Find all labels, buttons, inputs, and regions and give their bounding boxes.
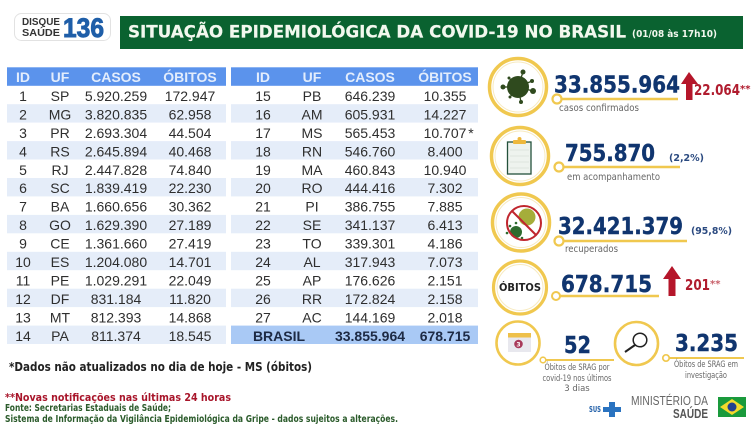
- table: states 1 to 14: 1.361.660: [85, 236, 147, 252]
- table: states 1 to 14: [7, 67, 226, 344]
- table: states 1 to 14: 9: [19, 236, 27, 252]
- table: states 1 to 14: ID: [16, 69, 30, 85]
- note: new notifications: **Novas notificações nas últimas 24 horas: [5, 391, 231, 404]
- table: states 1 to 14: 27.419: [169, 236, 212, 252]
- logo: Disque Saúde 136: SAÚDE: [22, 26, 60, 39]
- icon: clipboard: [492, 128, 548, 184]
- table: states 15 to 27 and Brazil total: 26: [255, 291, 271, 307]
- table: states 1 to 14: 10: [15, 254, 31, 270]
- table: states 1 to 14: RJ: [51, 162, 69, 178]
- table: states 1 to 14: MT: [50, 309, 71, 325]
- panel: recovered: [492, 194, 732, 255]
- table: states 15 to 27 and Brazil total: 16: [255, 106, 271, 122]
- table: states 15 to 27 and Brazil total: UF: [303, 69, 322, 85]
- table: states 1 to 14: 3.820.835: [85, 106, 147, 122]
- panel: SRAG deaths in last 3 days: 3 dias: [564, 384, 590, 394]
- source text: Fonte: Secretarias Estaduais de Saúde;: [5, 403, 171, 414]
- logo: SUS: SUS: [589, 405, 601, 414]
- table: states 1 to 14: 11: [16, 272, 30, 288]
- table: states 15 to 27 and Brazil total: 22: [255, 217, 271, 233]
- table: states 15 to 27 and Brazil total: 4.186: [427, 236, 463, 252]
- table: states 15 to 27 and Brazil total: 7.302: [427, 180, 463, 196]
- table: states 1 to 14: PA: [51, 328, 69, 344]
- table: states 15 to 27 and Brazil total: 2.018: [427, 309, 463, 325]
- table: states 15 to 27 and Brazil total: 17: [255, 125, 271, 141]
- table: states 1 to 14: 14: [15, 328, 31, 344]
- logo: Disque Saúde 136: 136: [63, 13, 104, 43]
- table: states 1 to 14: 8: [19, 217, 27, 233]
- source text: Sistema de Informação da Vigilância Epidemiológica da Gripe - dados sujeitos a alterações.: [5, 414, 398, 425]
- table: states 1 to 14: 1.029.291: [85, 272, 147, 288]
- title bar: (01/08 às 17h10): [632, 29, 717, 40]
- table: states 1 to 14: 74.840: [169, 162, 212, 178]
- table: states 1 to 14: 812.393: [91, 309, 142, 325]
- panel: SRAG deaths under investigation: 3.235: [675, 331, 738, 357]
- panel: under monitoring: 755.870: [565, 141, 655, 167]
- table: states 1 to 14: 7: [19, 199, 27, 215]
- table: states 15 to 27 and Brazil total: 386.755: [345, 199, 396, 215]
- table: states 15 to 27 and Brazil total: AC: [302, 309, 322, 325]
- table: states 15 to 27 and Brazil total: 24: [255, 254, 271, 270]
- panel: recovered: recuperados: [565, 244, 618, 255]
- panel: recovered: 32.421.379: [558, 214, 683, 240]
- table: states 15 to 27 and Brazil total: RN: [302, 143, 322, 159]
- table: states 15 to 27 and Brazil total: 20: [255, 180, 271, 196]
- table: states 15 to 27 and Brazil total: 646.239: [345, 88, 396, 104]
- table: states 1 to 14: 1.660.656: [85, 199, 147, 215]
- table: states 1 to 14: 22.230: [169, 180, 212, 196]
- title bar: SITUAÇÃO EPIDEMIOLÓGICA DA COVID-19 NO BRASIL: [128, 20, 626, 42]
- table: states 15 to 27 and Brazil total: [231, 67, 478, 344]
- table: states 1 to 14: 3: [19, 125, 27, 141]
- logo: Disque Saúde 136: DISQUE: [22, 16, 60, 28]
- table: states 1 to 14: 44.504: [169, 125, 212, 141]
- table: states 1 to 14: 1.839.419: [85, 180, 147, 196]
- table: states 15 to 27 and Brazil total: 19: [255, 162, 271, 178]
- table: states 1 to 14: 13: [15, 309, 31, 325]
- table: states 15 to 27 and Brazil total: 605.931: [345, 106, 396, 122]
- panel: SRAG deaths in last 3 days: Óbitos de SRAG por: [544, 361, 610, 373]
- table: states 1 to 14: ÓBITOS: [163, 68, 217, 85]
- table: states 15 to 27 and Brazil total: 176.626: [345, 272, 396, 288]
- table: states 1 to 14: ES: [51, 254, 69, 270]
- table: states 1 to 14: 2.693.304: [85, 125, 147, 141]
- table: states 1 to 14: 30.362: [169, 199, 212, 215]
- panel: deaths: [494, 261, 721, 314]
- logo: Ministério da Saúde: [631, 393, 708, 421]
- table: states 15 to 27 and Brazil total: 678.715: [420, 328, 471, 344]
- table: states 1 to 14: 811.374: [91, 328, 141, 344]
- table: states 1 to 14: 14.868: [169, 309, 212, 325]
- table: states 1 to 14: 4: [19, 143, 27, 159]
- logo: SUS: [589, 402, 621, 417]
- table: states 15 to 27 and Brazil total: 7.885: [427, 199, 463, 215]
- table: states 15 to 27 and Brazil total: AL: [303, 254, 321, 270]
- table: states 1 to 14: DF: [51, 291, 69, 307]
- table: states 1 to 14: 2: [19, 106, 27, 122]
- table: states 1 to 14: GO: [49, 217, 71, 233]
- table: states 1 to 14: 2.447.828: [85, 162, 147, 178]
- icon: magnifying glass: [615, 322, 658, 365]
- table: states 1 to 14: CE: [50, 236, 70, 252]
- panel: confirmed cases: **: [740, 84, 751, 95]
- table: states 15 to 27 and Brazil total: 15: [255, 88, 271, 104]
- panel: deaths: 678.715: [561, 272, 652, 298]
- table: states 15 to 27 and Brazil total: 33.855.964: [335, 328, 405, 344]
- logo: Ministério da Saúde: MINISTÉRIO DA: [631, 393, 708, 408]
- table: states 1 to 14: PR: [50, 125, 70, 141]
- table: states 1 to 14: 12: [15, 291, 31, 307]
- table: states 15 to 27 and Brazil total: 21: [255, 199, 271, 215]
- logo: Ministério da Saúde: SAÚDE: [673, 406, 708, 421]
- table: states 15 to 27 and Brazil total: 10.707: [424, 125, 467, 141]
- table: states 1 to 14: SC: [50, 180, 70, 196]
- table: states 15 to 27 and Brazil total: AM: [302, 106, 322, 122]
- table: states 1 to 14: BA: [51, 199, 70, 215]
- panel: under monitoring: em acompanhamento: [567, 172, 660, 183]
- table: states 15 to 27 and Brazil total: RO: [302, 180, 323, 196]
- source text: [5, 403, 398, 425]
- table: states 15 to 27 and Brazil total: ID: [256, 69, 270, 85]
- table: states 15 to 27 and Brazil total: 339.301: [345, 236, 396, 252]
- table: states 1 to 14: 14.701: [169, 254, 212, 270]
- icon: calendar: 3: [516, 342, 521, 348]
- table: states 1 to 14: 18.545: [169, 328, 212, 344]
- table: states 15 to 27 and Brazil total: 546.760: [345, 143, 396, 159]
- table: states 1 to 14: 22.049: [169, 272, 212, 288]
- table: states 15 to 27 and Brazil total: ÓBITOS: [418, 68, 472, 85]
- table: states 15 to 27 and Brazil total: 2.151: [427, 272, 463, 288]
- table: states 15 to 27 and Brazil total: 2.158: [427, 291, 463, 307]
- table: states 1 to 14: PE: [51, 272, 69, 288]
- table: states 1 to 14: SP: [51, 88, 69, 104]
- table: states 15 to 27 and Brazil total: 7.073: [427, 254, 463, 270]
- table: states 15 to 27 and Brazil total: 25: [255, 272, 271, 288]
- table: states 15 to 27 and Brazil total: 10.355: [424, 88, 467, 104]
- table: states 15 to 27 and Brazil total: 565.453: [345, 125, 396, 141]
- table: states 15 to 27 and Brazil total: BRASIL: [253, 328, 305, 344]
- arrow: cases up: [681, 72, 698, 100]
- table: states 1 to 14: 5.920.259: [85, 88, 147, 104]
- table: states 1 to 14: 62.958: [169, 106, 212, 122]
- table: states 15 to 27 and Brazil total: 6.413: [427, 217, 463, 233]
- panel: confirmed cases: 22.064: [694, 81, 740, 99]
- table: states 15 to 27 and Brazil total: 8.400: [427, 143, 463, 159]
- table: states 1 to 14: 1.204.080: [85, 254, 147, 270]
- panel: SRAG deaths under investigation: investigação: [685, 371, 727, 381]
- table: states 1 to 14: 172.947: [165, 88, 216, 104]
- panel: deaths: **: [710, 279, 721, 290]
- table: states 15 to 27 and Brazil total: 172.824: [345, 291, 396, 307]
- panel: under monitoring: [492, 128, 704, 184]
- table: states 1 to 14: 2.645.894: [85, 143, 147, 159]
- table: states 15 to 27 and Brazil total: 460.843: [345, 162, 396, 178]
- table: states 15 to 27 and Brazil total: MS: [302, 125, 322, 141]
- table: states 15 to 27 and Brazil total: 14.227: [424, 106, 467, 122]
- table: states 1 to 14: 1: [19, 88, 27, 104]
- table: states 15 to 27 and Brazil total: PB: [303, 88, 321, 104]
- panel: under monitoring: (2,2%): [669, 153, 704, 164]
- table: states 15 to 27 and Brazil total: AP: [303, 272, 321, 288]
- table: states 1 to 14: 5: [19, 162, 27, 178]
- panel: deaths: 201: [685, 276, 710, 294]
- logo: Disque Saúde 136: [14, 13, 110, 43]
- table: states 15 to 27 and Brazil total: RR: [302, 291, 322, 307]
- panel: SRAG deaths under investigation: [615, 322, 744, 381]
- panel: recovered: (95,8%): [691, 226, 732, 237]
- table: states 15 to 27 and Brazil total: 18: [255, 143, 271, 159]
- table: states 1 to 14: 27.189: [169, 217, 212, 233]
- table: states 15 to 27 and Brazil total: 317.943: [345, 254, 396, 270]
- panel: confirmed cases: [490, 58, 751, 116]
- table: states 1 to 14: 1.629.390: [85, 217, 147, 233]
- table: states 1 to 14: 831.184: [91, 291, 142, 307]
- icon: deaths badge: [494, 261, 546, 314]
- table: states 1 to 14: 40.468: [169, 143, 212, 159]
- icon: Brazilian flag: [718, 397, 746, 417]
- note: data not updated: *Dados não atualizados no dia de hoje - MS (óbitos): [9, 359, 312, 374]
- icon: deaths badge: ÓBITOS: [499, 281, 541, 294]
- table: states 15 to 27 and Brazil total: 27: [255, 309, 271, 325]
- table: states 15 to 27 and Brazil total: 444.416: [345, 180, 396, 196]
- icon: virus: [490, 58, 546, 116]
- table: states 1 to 14: CASOS: [91, 69, 141, 85]
- table: states 15 to 27 and Brazil total: CASOS: [345, 69, 395, 85]
- panel: SRAG deaths in last 3 days: 52: [564, 333, 591, 359]
- panel: SRAG deaths in last 3 days: covid-19 nos últimos: [542, 374, 612, 384]
- table: states 15 to 27 and Brazil total: SE: [303, 217, 321, 233]
- table: states 15 to 27 and Brazil total: MA: [302, 162, 323, 178]
- panel: confirmed cases: casos confirmados: [559, 103, 639, 114]
- table: states 1 to 14: 11.820: [169, 291, 211, 307]
- table: states 15 to 27 and Brazil total: *: [468, 125, 474, 141]
- title bar: [120, 16, 743, 49]
- table: states 15 to 27 and Brazil total: 144.169: [345, 309, 396, 325]
- panel: confirmed cases: 33.855.964: [554, 73, 680, 99]
- table: states 15 to 27 and Brazil total: 23: [255, 236, 271, 252]
- arrow: deaths up: [663, 266, 681, 296]
- table: states 1 to 14: RS: [50, 143, 70, 159]
- icon: crossed-out viruses: [492, 194, 550, 251]
- table: states 15 to 27 and Brazil total: PI: [305, 199, 319, 215]
- table: states 1 to 14: MG: [49, 106, 71, 122]
- table: states 15 to 27 and Brazil total: 10.940: [424, 162, 467, 178]
- panel: SRAG deaths in last 3 days: [496, 322, 614, 394]
- table: states 15 to 27 and Brazil total: 341.137: [345, 217, 396, 233]
- table: states 1 to 14: UF: [51, 69, 70, 85]
- table: states 1 to 14: 6: [19, 180, 27, 196]
- table: states 15 to 27 and Brazil total: TO: [302, 236, 322, 252]
